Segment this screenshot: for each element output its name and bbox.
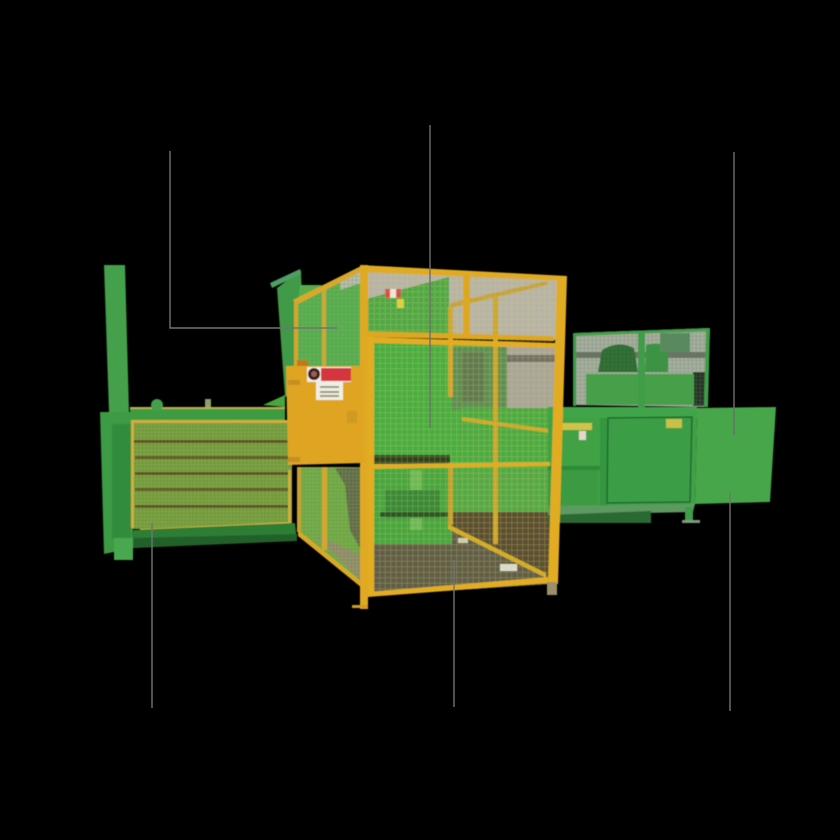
safety sign: [316, 382, 343, 400]
cage interior: [366, 268, 562, 596]
left upright post: [104, 265, 129, 412]
support leg: [685, 507, 693, 521]
small warning label: [579, 431, 586, 440]
motor: [598, 344, 638, 372]
control door: [607, 417, 692, 503]
interior base green: [366, 338, 560, 596]
number sticker: [397, 299, 404, 308]
column foot: [114, 538, 133, 560]
rear hopper: [270, 269, 330, 397]
right baler body: [548, 328, 776, 523]
hopper chute: [277, 270, 330, 397]
yellow label: [562, 423, 592, 430]
roller door mesh panel: [131, 420, 292, 532]
grey background wall: [366, 268, 562, 340]
callout line: bottom left: [151, 523, 153, 708]
floor: [366, 527, 552, 596]
warning flag sticker: [385, 289, 401, 298]
lower left panel: [548, 466, 600, 470]
callout line: top left: [170, 151, 337, 328]
side cage: [293, 265, 365, 588]
side mesh lower: [298, 467, 362, 582]
door label: [666, 419, 682, 428]
front mesh: [366, 268, 562, 596]
top rail: [130, 395, 285, 420]
middle green body: [460, 408, 554, 464]
left baler section: [100, 265, 297, 560]
side mesh upper: [296, 268, 364, 366]
callout line: top centre: [429, 125, 431, 428]
callout line: top right: [733, 152, 735, 435]
beacon: [297, 360, 308, 366]
upper green hopper: [366, 277, 449, 336]
dark cable bay: [693, 372, 706, 406]
compactor body: [548, 407, 697, 514]
base rail: [548, 504, 695, 515]
side frame bars: [293, 265, 365, 305]
base channel: [133, 523, 297, 548]
interior rear posts: [448, 307, 453, 397]
dark machinery behind mesh: [451, 347, 507, 410]
left end column: [100, 412, 133, 554]
lower green body: [374, 470, 552, 542]
callout line: bottom right: [729, 493, 731, 711]
door handle: [347, 411, 357, 423]
cage frame: [575, 328, 710, 336]
brown floor behind cage: [450, 512, 552, 582]
warning sign: [307, 367, 351, 382]
main cage front frame: [352, 265, 567, 609]
side panel: [695, 407, 776, 504]
baler machine: [100, 265, 776, 609]
callout line: bottom centre: [453, 560, 455, 707]
yellow access door: [286, 360, 364, 465]
motor cage: [573, 328, 710, 407]
hydraulic tank: [586, 374, 694, 405]
door hinges: [288, 380, 300, 385]
